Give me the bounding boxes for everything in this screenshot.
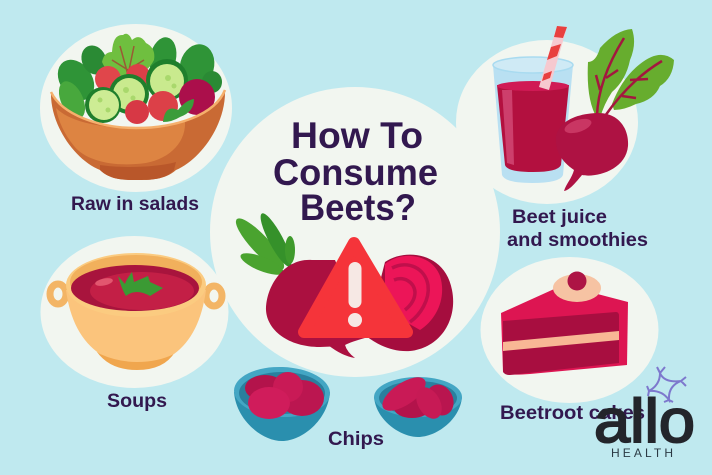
icon: sliced beet (366, 255, 453, 351)
label: beet juice and smoothies (507, 207, 648, 251)
label: beet juice and smoothies: and smoothies (507, 230, 648, 251)
title: Consume (273, 152, 438, 193)
icon: juice glass (493, 57, 573, 183)
icon: salad bowl (51, 90, 225, 180)
icon: beet soup (71, 265, 199, 311)
icon: salad leaves (50, 34, 222, 123)
label: raw in salads: Raw in salads (71, 194, 199, 215)
icon: cream and cherry (553, 272, 601, 302)
icon: logo spark (647, 367, 686, 402)
icon: right chips bowl (374, 371, 462, 437)
icon: cake slice (501, 285, 628, 375)
title (273, 115, 438, 228)
label: chips: Chips (328, 429, 384, 450)
logo subtitle: HEALTH (611, 446, 673, 460)
icon: striped straw (539, 26, 567, 90)
logo wordmark: allo (594, 387, 695, 455)
label: beet juice and smoothies: Beet juice (512, 207, 607, 228)
label: soups: Soups (107, 391, 167, 412)
icon: beet leaves (230, 210, 296, 279)
label: beetroot cakes: Beetroot cakes (500, 403, 645, 424)
icon: soup bowl handles (50, 284, 222, 306)
icon: salad tomatoes and cucumbers (85, 59, 215, 124)
panel: chips (233, 365, 462, 450)
panel: raw in salads (50, 34, 225, 215)
icon: soup bowl (66, 253, 206, 370)
panel: beetroot cakes (500, 272, 645, 424)
title: How To (291, 115, 423, 156)
icon: beet with leaves (556, 29, 674, 191)
icon: left chips bowl (233, 365, 331, 441)
title: Beets? (300, 187, 416, 228)
panel: beet juice and smoothies (493, 26, 674, 251)
icon: warning triangle (304, 243, 407, 358)
panel: how to consume beets (230, 115, 453, 358)
panel: soups (50, 253, 222, 412)
logo: allo health (594, 367, 695, 460)
icon: whole beet (266, 260, 352, 347)
